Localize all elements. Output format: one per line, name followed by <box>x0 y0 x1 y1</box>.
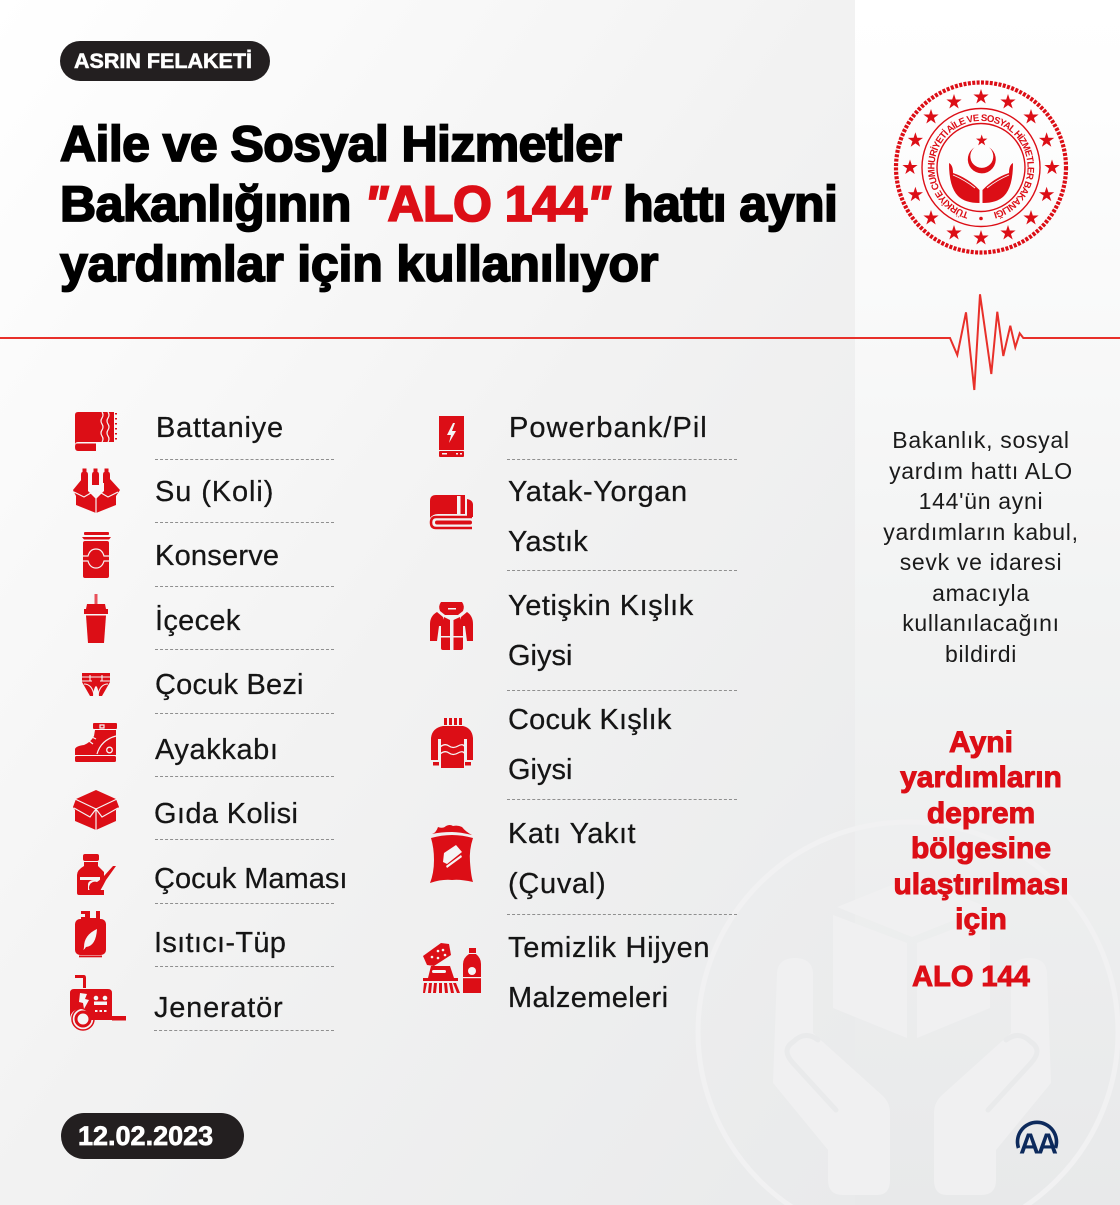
callout: ulaştırılması <box>893 868 1069 901</box>
icon: blanket <box>75 412 117 451</box>
tag: ASRIN FELAKETİ: ASRIN FELAKETİ <box>74 49 252 73</box>
item: Yetişkin Kışlık Giysi <box>430 590 737 691</box>
side text: Bakanlık, sosyal <box>892 427 1070 453</box>
seismic line <box>0 294 1120 390</box>
item: Temizlik Hijyen Malzemeleri: Malzemeleri <box>508 982 668 1014</box>
item: Powerbank/Pil <box>439 412 737 460</box>
icon: drink cup <box>84 594 108 643</box>
item: Powerbank/Pil: Powerbank/Pil <box>509 412 708 444</box>
AA logo <box>1016 1120 1058 1156</box>
icon: canned food <box>82 532 111 578</box>
item: Çocuk Maması <box>77 854 347 904</box>
callout <box>893 726 1069 993</box>
item: Gıda Kolisi: Gıda Kolisi <box>154 798 298 830</box>
item: İçecek: İçecek <box>155 605 241 637</box>
callout: için <box>955 903 1007 936</box>
item: Çocuk Maması: Çocuk Maması <box>154 863 347 895</box>
callout: deprem <box>927 797 1035 830</box>
item: Katı Yakıt (Çuval): Katı Yakıt <box>508 818 636 850</box>
side text: sevk ve idaresi <box>900 549 1062 575</box>
item: Su (Koli) <box>73 468 334 523</box>
item: Ayakkabı: Ayakkabı <box>155 734 279 766</box>
callout: bölgesine <box>911 832 1051 865</box>
list: right column <box>423 412 737 1014</box>
icon: folded quilt <box>430 495 473 530</box>
item: Battaniye <box>75 412 334 460</box>
item: Isıtıcı-Tüp <box>75 911 334 967</box>
icon: diaper <box>82 673 110 696</box>
item: Battaniye: Battaniye <box>156 412 284 444</box>
item: Jeneratör: Jeneratör <box>154 992 283 1024</box>
item: Temizlik Hijyen Malzemeleri: Temizlik Hijyen <box>508 932 710 964</box>
callout: Ayni <box>949 726 1013 759</box>
tag: ASRIN FELAKETİ <box>60 41 270 81</box>
callout: ALO 144 <box>912 961 1030 993</box>
icon: baby food bottle and spoon <box>77 854 116 895</box>
date pill <box>61 1113 244 1159</box>
item: Temizlik Hijyen Malzemeleri <box>423 932 710 1014</box>
side text: bildirdi <box>945 640 1017 666</box>
item: Su (Koli): Su (Koli) <box>155 476 274 508</box>
side text: amacıyla <box>932 580 1030 606</box>
item: Cocuk Kışlık Giysi <box>431 704 737 800</box>
icon: generator <box>70 975 126 1031</box>
item: Katı Yakıt (Çuval) <box>430 818 737 915</box>
item: Yatak-Yorgan Yastık: Yastık <box>508 526 588 558</box>
date pill: 12.02.2023 <box>78 1121 213 1151</box>
title: Aile ve Sosyal Hizmetler <box>60 116 621 172</box>
side text: yardım hattı ALO <box>889 458 1073 484</box>
icon: boot <box>75 723 117 762</box>
ministry seal: TÜRKİYE CUMHURİYETİ AİLE VE SOSYAL HİZMETLER BAKANLIĞI <box>928 114 1034 219</box>
title: Bakanlığının "ALO 144" hattı ayni <box>60 176 837 232</box>
item: Konserve: Konserve <box>155 540 279 572</box>
icon: cardboard box <box>73 790 119 830</box>
title: yardımlar için kullanılıyor <box>60 236 658 292</box>
item: Jeneratör <box>70 975 334 1031</box>
icon: fuel sack <box>430 825 473 883</box>
item: Yetişkin Kışlık Giysi: Yetişkin Kışlık <box>508 590 694 622</box>
side text: kullanılacağını <box>902 610 1060 636</box>
item: Çocuk Bezi <box>82 669 334 714</box>
icon: gas cylinder <box>75 911 106 958</box>
item: Yetişkin Kışlık Giysi: Giysi <box>508 640 572 672</box>
icon: winter jacket <box>430 602 473 650</box>
icon: sweater <box>431 718 473 768</box>
icon: water crate <box>73 468 120 513</box>
list: left column <box>70 412 347 1031</box>
item: Yatak-Yorgan Yastık <box>430 476 737 571</box>
icon: cleaning supplies <box>423 943 481 993</box>
item: İçecek <box>84 594 334 650</box>
item: Konserve <box>82 532 334 587</box>
item: Ayakkabı <box>75 723 334 777</box>
title <box>59 116 837 292</box>
icon: powerbank <box>439 416 464 457</box>
callout: yardımların <box>900 761 1062 794</box>
item: Çocuk Bezi: Çocuk Bezi <box>155 669 304 701</box>
side text <box>883 427 1079 666</box>
item: Yatak-Yorgan Yastık: Yatak-Yorgan <box>508 476 688 508</box>
ministry seal <box>894 80 1068 255</box>
item: Gıda Kolisi <box>73 790 334 840</box>
item: Katı Yakıt (Çuval): (Çuval) <box>508 868 606 900</box>
item: Cocuk Kışlık Giysi: Cocuk Kışlık <box>508 704 672 736</box>
side text: 144'ün ayni <box>919 488 1043 514</box>
item: Cocuk Kışlık Giysi: Giysi <box>508 754 572 786</box>
item: Isıtıcı-Tüp: Isıtıcı-Tüp <box>154 927 286 959</box>
side text: yardımların kabul, <box>883 518 1079 544</box>
